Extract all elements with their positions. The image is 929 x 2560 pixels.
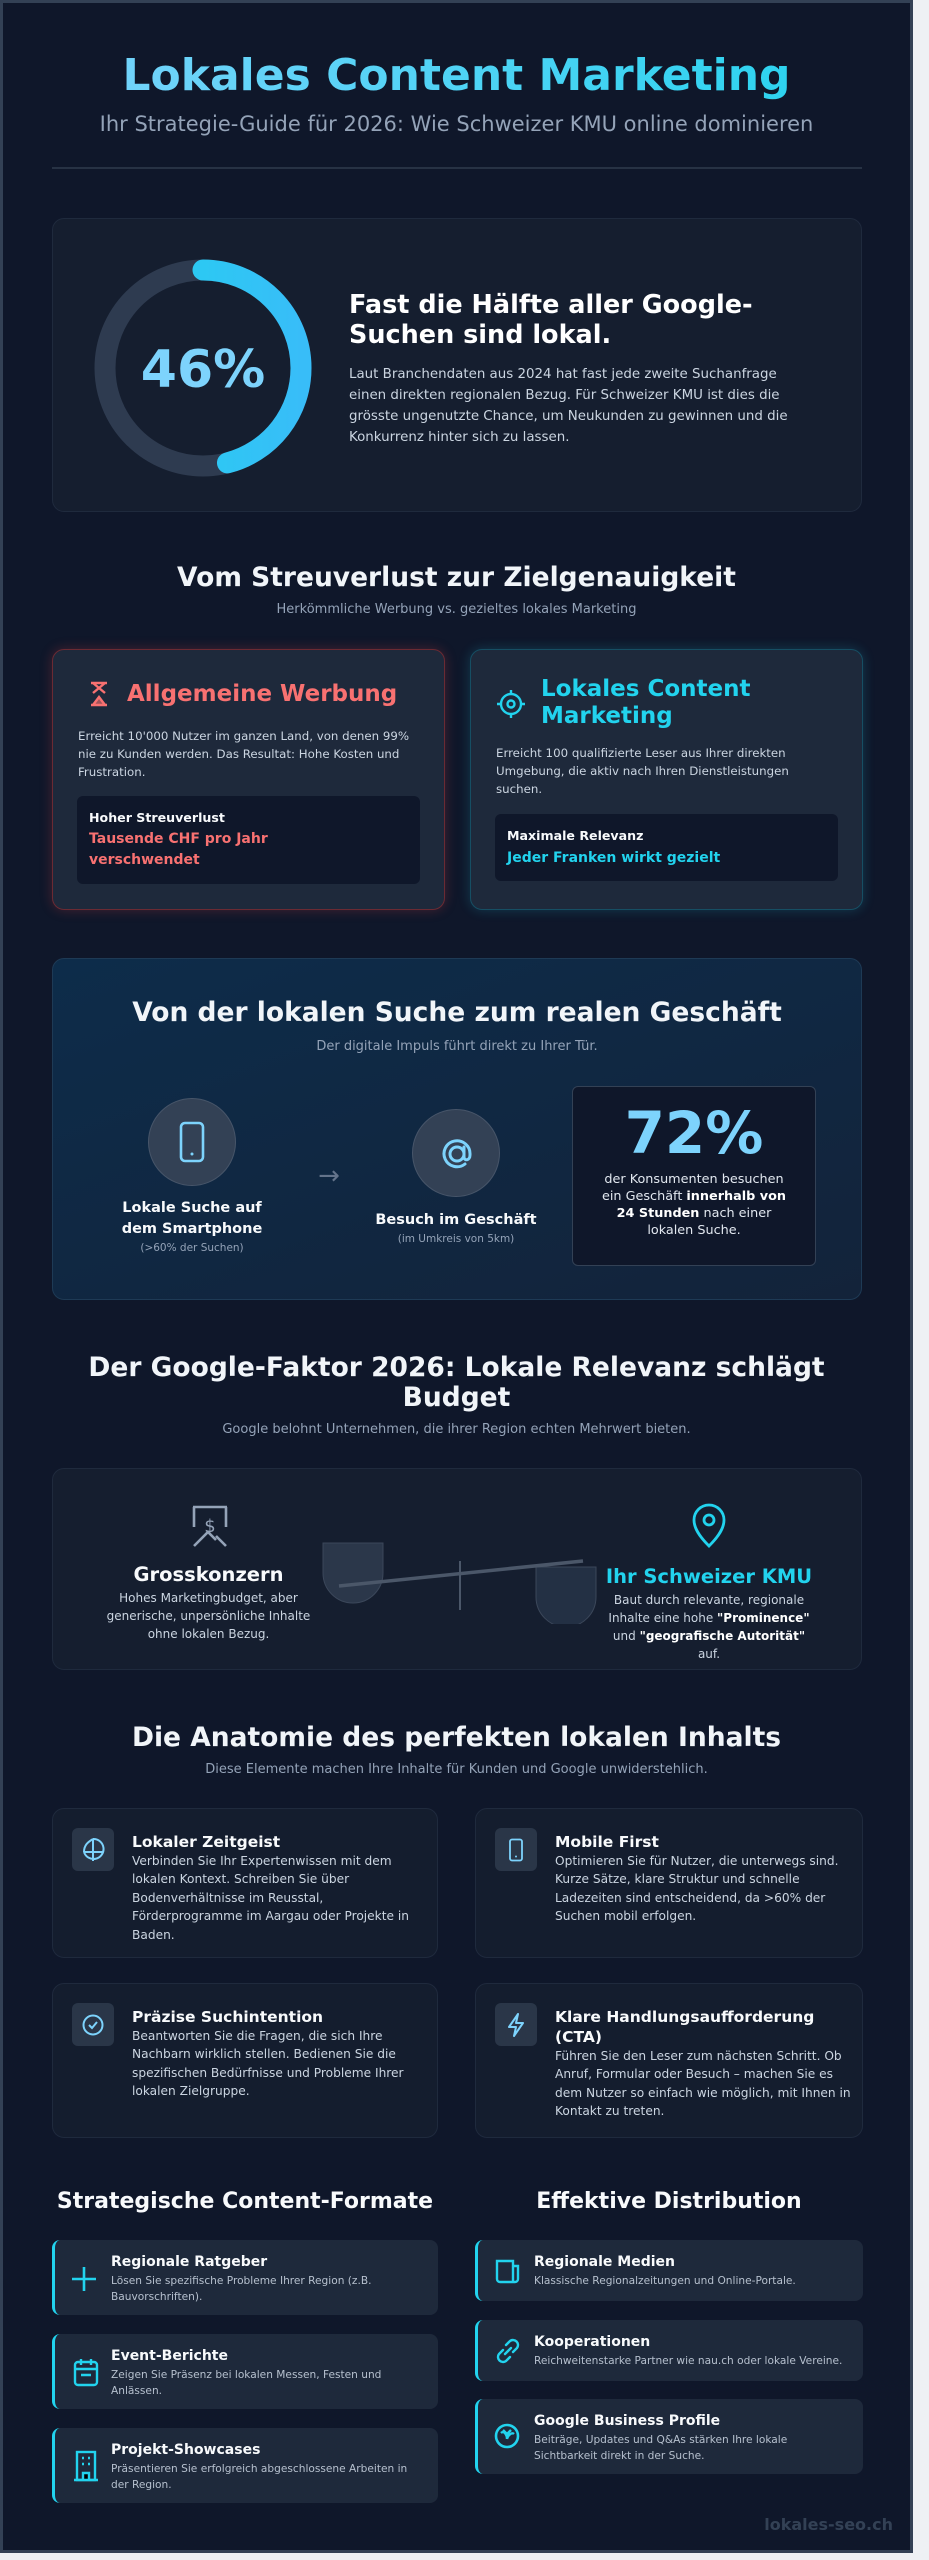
label: Lokale Suche: Lokale Suche auf dem Smartphone [122,1200,262,1237]
heading: Google-Faktor: Der Google-Faktor 2026: Lokale Relevanz schlägt Budget [88,1352,825,1413]
text: Google Business Profile [534,2413,720,2429]
label: Lokale Suche [122,1200,262,1254]
icon: globe [72,1828,114,1871]
text: Ihr Schweizer KMU: Ihr Schweizer KMU [606,1565,812,1588]
heading: Vom Streuverlust: Vom Streuverlust zur Zielgenauigkeit [177,562,736,593]
icon: money bag [192,1506,228,1547]
text: Lösen Sie spezifische Probleme Ihrer Region (z.B. Bauvorschriften). [111,2275,371,2302]
callout: Maximale Relevanz [495,814,838,881]
text: Ihr Schweizer KMU: Baut durch relevante, regionale Inhalte eine hohe "Prominence" und "geografische Autorität" auf. [608,1593,810,1661]
text: Klassische Regionalzeitungen und Online-Portale. [534,2275,796,2287]
callout: Hoher Streuverlust [77,796,420,884]
text [111,2442,407,2490]
text: Grosskonzern: Grosskonzern [133,1563,284,1586]
icon: link [496,2338,520,2364]
footer: brand: lokales-seo.ch [764,2515,893,2534]
icon: location pin [692,1504,726,1548]
panel: Von der lokalen Suche [52,958,862,1300]
text: Beiträge, Updates und Q&As stärken Ihre lokale Sichtbarkeit direkt in der Suche. [534,2434,787,2462]
panel: 46% stat [52,218,862,512]
text: Lokaler Zeitgeist [132,1833,280,1851]
label: Besuch im Geschäft: (im Umkreis von 5km) [398,1233,514,1245]
text block: Laut Branchendaten aus 2024 hat fast jede zweite Suchanfrage einen direkten regionalen Bezug. Für Schweizer KMU ist dies die grösste ungenutzte Chance, um Neukunden zu gewinnen und die Konkurrenz hinter sich zu lassen. [349,367,788,445]
heading: Allgemeine Werbung [127,681,397,707]
subheading: Herkömmliche Werbung vs. gezieltes lokales Marketing [277,602,636,617]
icon: money bag: $ [204,1516,216,1537]
subheading: Der digitale Impuls führt direkt zu Ihrer Tür. [316,1039,598,1054]
heading: Anatomie: Die Anatomie des perfekten lokalen Inhalts [132,1722,781,1753]
card: CTA [475,1983,863,2138]
heading: Fast die Hälfte: Fast die Hälfte aller Google-Suchen sind lokal. [349,290,753,350]
subheading: Diese Elemente machen Ihre Inhalte für Kunden und Google unwiderstehlich. [205,1762,708,1777]
text [555,2008,851,2118]
callout: 72%: der Konsumenten besuchen ein Geschäft innerhalb von 24 Stunden nach einer lokalen Suche. [602,1172,786,1238]
callout: Hoher Streuverlust: Hoher Streuverlust [89,810,225,825]
text: Regionale Medien [534,2254,675,2270]
text: Ihr Schweizer KMU [606,1565,812,1661]
text: Regionale Ratgeber [111,2254,267,2270]
text [534,2254,796,2287]
text [534,2334,842,2367]
icon: target [497,690,525,718]
callout: Hoher Streuverlust: Tausende CHF pro Jahr verschwendet [89,831,268,868]
panel: Vergleich Grosskonzern vs KMU [52,1468,862,1670]
label: Lokale Suche: (>60% der Suchen) [140,1242,244,1254]
title: Lokales Content Marketing [122,50,791,101]
text: Mobile First [555,1833,659,1851]
text: Erreicht 100 qualifizierte Leser aus Ihrer direkten Umgebung, die aktiv nach Ihren Dienstleistungen suchen. [496,746,789,796]
chart: ring 46%: 46% [141,340,265,400]
card: Regionale Medien [475,2240,863,2301]
icon: hourglass [91,682,107,706]
callout: 72%: 72% [625,1099,763,1167]
icon: lightning [495,2003,537,2046]
icon: newspaper [496,2260,520,2284]
text: Optimieren Sie für Nutzer, die unterwegs sind. Kurze Sätze, klare Struktur und schnelle Ladezeiten sind entscheidend, da >60% der Suchen mobil erfolgen. [555,1854,838,1923]
icon: badge [494,2424,520,2448]
text: Reichweitenstarke Partner wie nau.ch oder lokale Vereine. [534,2355,842,2367]
text [111,2348,381,2396]
text: Grosskonzern [107,1563,310,1641]
icon: at circle [412,1109,500,1197]
text: Event-Berichte [111,2348,228,2364]
text: Verbinden Sie Ihr Expertenwissen mit dem lokalen Kontext. Schreiben Sie über Bodenverhältnisse im Reusstal, Förderprogramme im Aargau oder Projekte in Baden. [132,1854,409,1942]
callout: Maximale Relevanz: Maximale Relevanz [507,828,643,843]
text: Erreicht 10'000 Nutzer im ganzen Land, von denen 99% nie zu Kunden werden. Das Resultat: Hohe Kosten und Frustration. [78,729,409,779]
card: Projekt-Showcases [52,2428,438,2503]
card: Präzise Suchintention [52,1983,438,2138]
icon: check circle [72,2003,114,2046]
icon: building [74,2450,98,2482]
text: Zeigen Sie Präsenz bei lokalen Messen, Festen und Anlässen. [111,2369,381,2396]
icon: phone [495,1828,537,1871]
chart: balance scale [322,1542,596,1624]
card: Event-Berichte [52,2334,438,2409]
label: Besuch im Geschäft [375,1212,537,1245]
subheading: Google belohnt Unternehmen, die ihrer Region echten Mehrwert bieten. [222,1422,691,1437]
arrow: → [318,1161,340,1191]
callout: Maximale Relevanz: Jeder Franken wirkt gezielt [507,850,720,866]
callout: 72% [572,1086,816,1266]
subtitle: Ihr Strategie-Guide für 2026: Wie Schweizer KMU online dominieren [100,112,813,136]
title [3,48,910,104]
text: Klare Handlungsaufforderung (CTA) [555,2008,814,2046]
label: Besuch im Geschäft: Besuch im Geschäft [375,1212,537,1228]
text [534,2413,787,2462]
icon: calendar [74,2359,98,2386]
heading: Lokales Content Marketing [541,676,750,729]
text: Präsentieren Sie erfolgreich abgeschlossene Arbeiten in der Region. [111,2463,407,2490]
text: Projekt-Showcases [111,2442,260,2458]
text: Beantworten Sie die Fragen, die sich Ihre Nachbarn wirklich stellen. Bedienen Sie die spezifischen Bedürfnisse und Probleme Ihrer lokalen Zielgruppe. [132,2029,404,2098]
card: Mobile First [475,1808,863,1958]
icon: plus [72,2267,96,2291]
icon: smartphone circle [148,1098,236,1186]
panel: Allgemeine Werbung [52,649,445,910]
heading: Effektive Distribution: Effektive Distribution [536,2189,802,2214]
card: Kooperationen [475,2320,863,2381]
card: Google Business Profile [475,2399,863,2474]
card: Lokaler Zeitgeist [52,1808,438,1958]
text: Führen Sie den Leser zum nächsten Schritt. Ob Anruf, Formular oder Besuch – machen Sie es dem Nutzer so einfach wie möglich, mit Ihnen in Kontakt zu treten. [555,2049,851,2118]
text: Präzise Suchintention [132,2008,323,2026]
text [111,2254,371,2302]
text: Kooperationen [534,2334,650,2350]
chart: ring 46% [94,260,312,476]
panel: Lokales Content Marketing [470,649,863,910]
heading: Strategische Content-Formate: Strategische Content-Formate [57,2189,433,2214]
heading: Von der lokalen Suche zum realen Geschäft [132,997,782,1028]
card: Regionale Ratgeber [52,2240,438,2315]
text: Grosskonzern: Hohes Marketingbudget, aber generische, unpersönliche Inhalte ohne lokalen Bezug. [107,1591,310,1641]
